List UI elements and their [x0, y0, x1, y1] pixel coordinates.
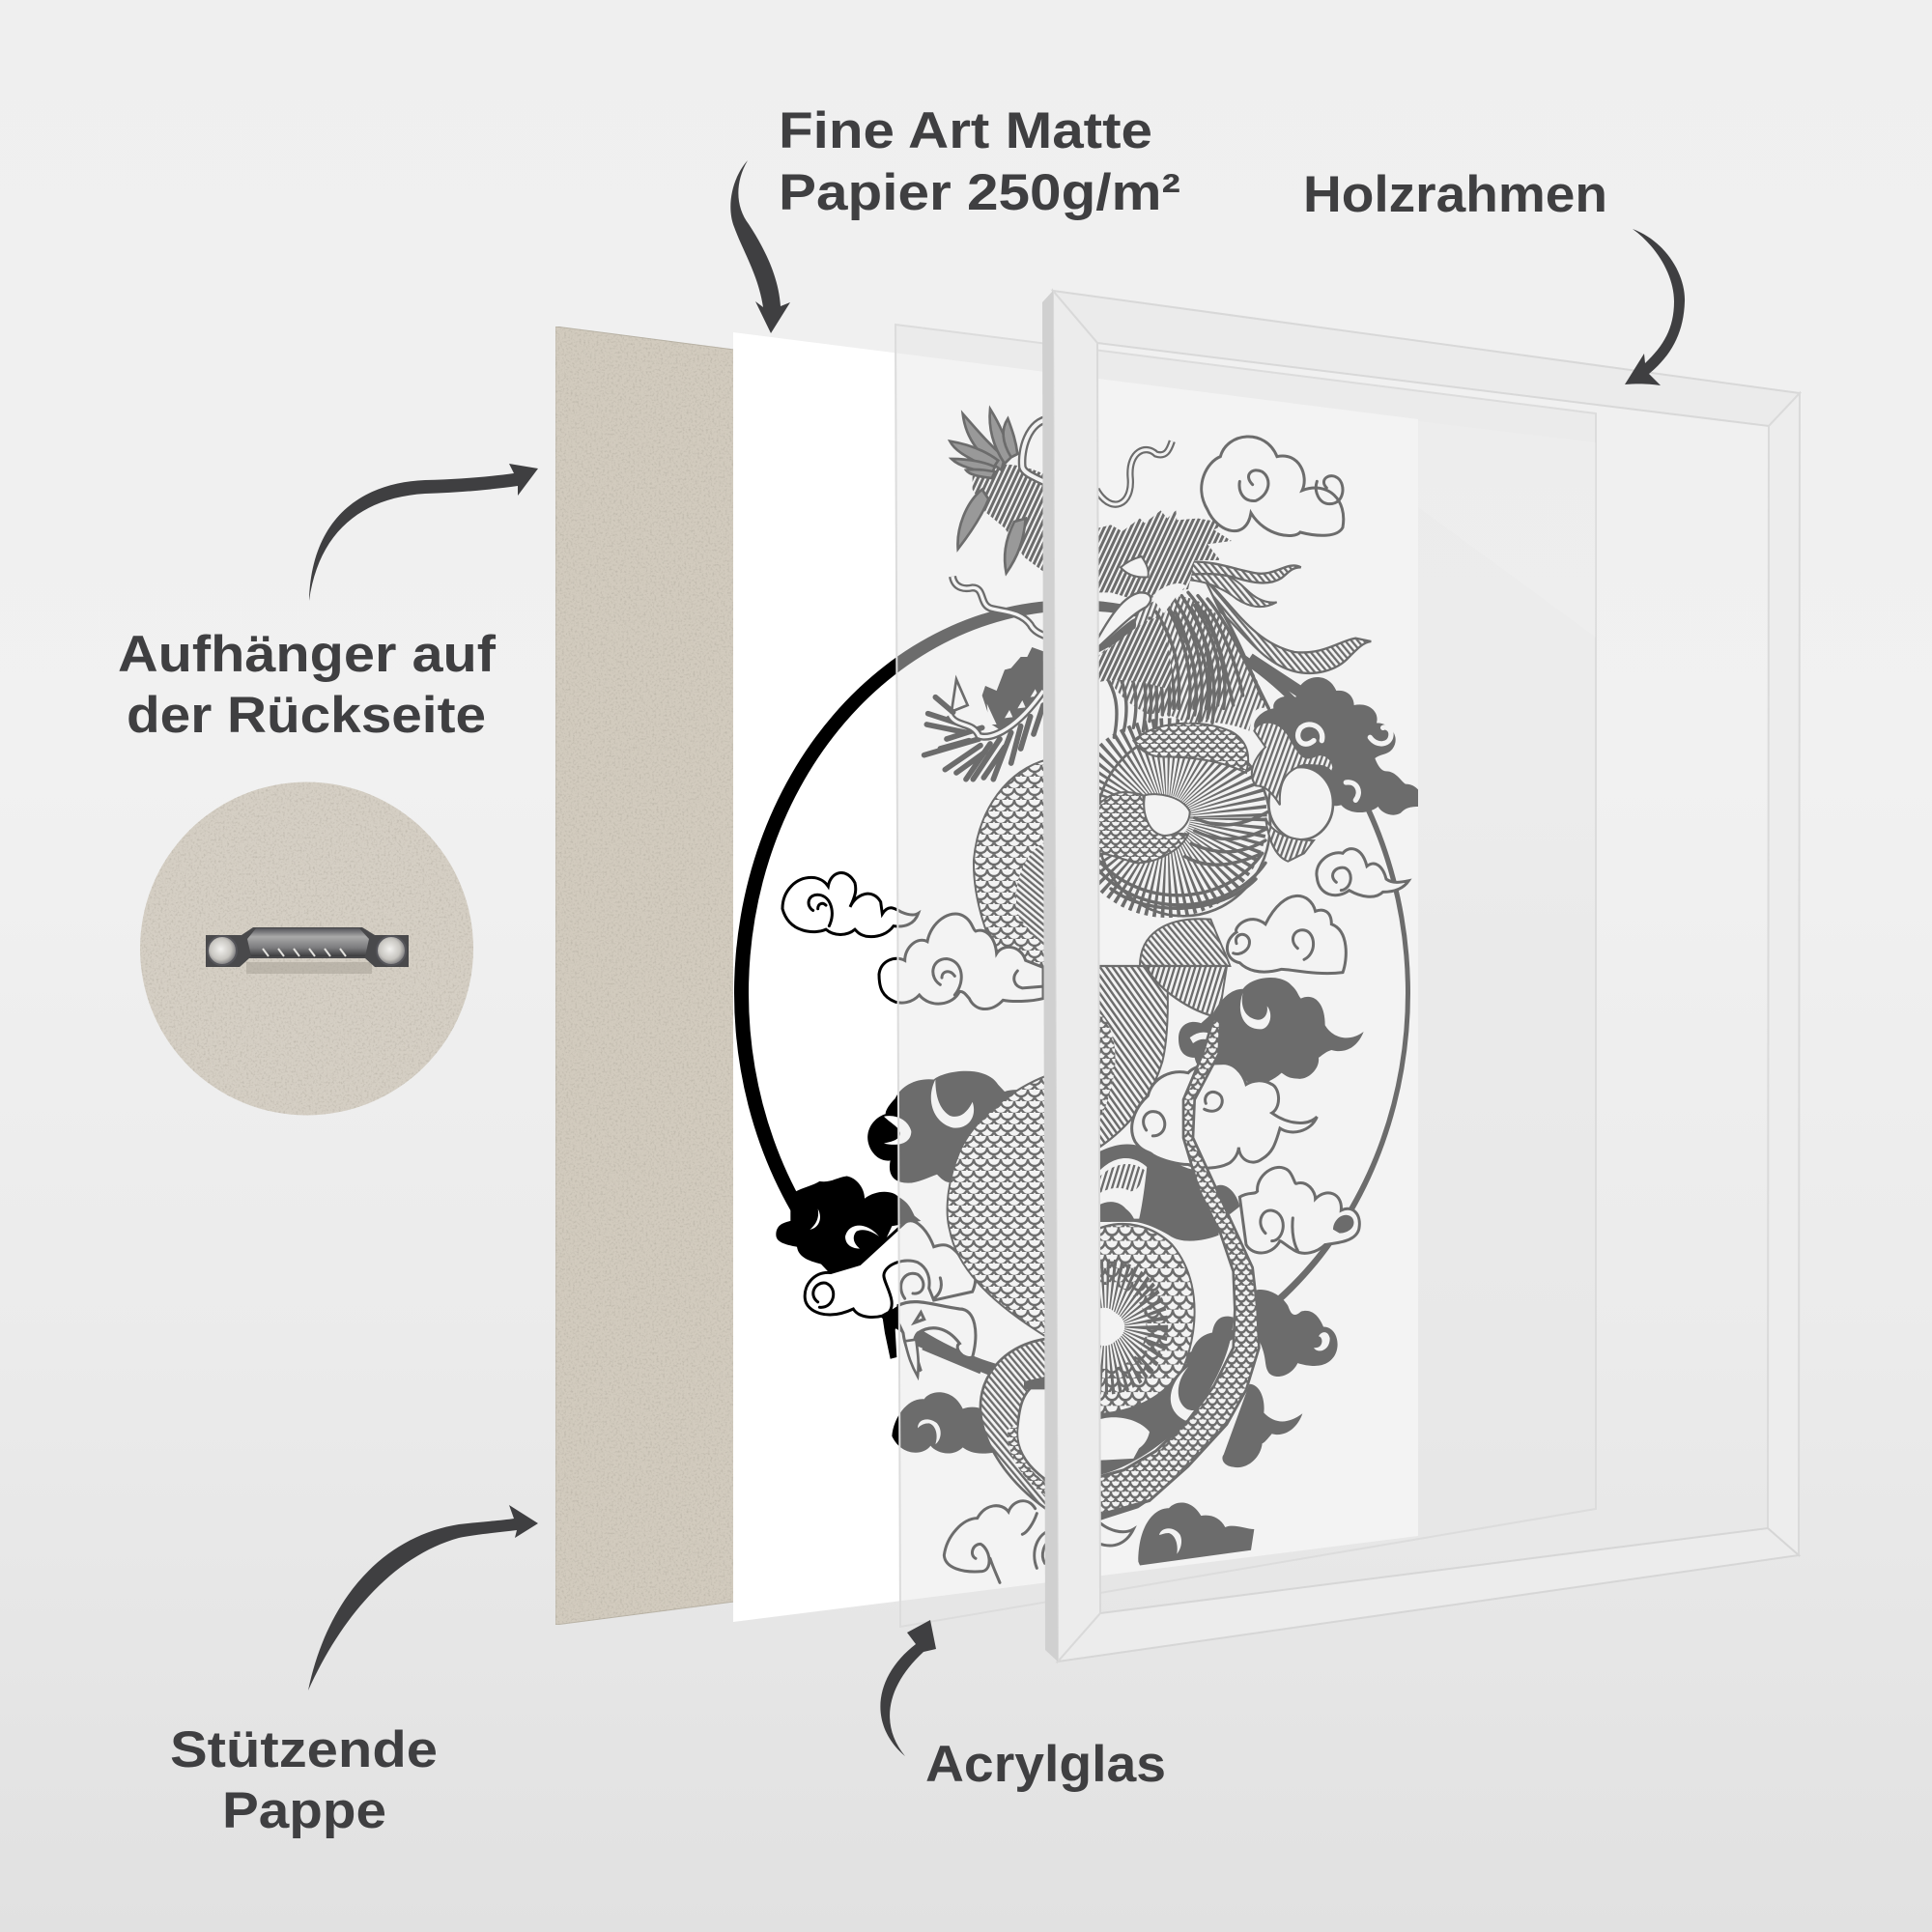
talon [905, 1340, 919, 1377]
paw shade [1096, 1202, 1127, 1222]
swirls of cloud F [1144, 1092, 1222, 1136]
neck and head of dragon, right side [1096, 437, 1420, 974]
frame top rail [1053, 291, 1800, 426]
hanger teeth [263, 949, 346, 956]
white cloud in solid [1096, 1417, 1150, 1461]
leg and talons [898, 1302, 976, 1371]
glare on acrylic glass [1418, 421, 1596, 638]
paw detail [1096, 1164, 1145, 1195]
callout: hanger detail circle [140, 782, 473, 1115]
white spot [1144, 794, 1190, 836]
scale fill under disc [1096, 1500, 1150, 1521]
panel: supporting cardboard [555, 327, 734, 1625]
crescent under disc [1171, 1367, 1208, 1421]
cloud I upper [1254, 1290, 1338, 1377]
ring thick section near cloud B [1249, 659, 1301, 693]
outlined cloud C [1317, 849, 1408, 896]
lower left scales [948, 1075, 1048, 1338]
lower fan concentric curves [1098, 811, 1268, 908]
lower fan band [980, 1337, 1045, 1510]
swirls of cloud A [1239, 470, 1343, 504]
label: acrylic glass: Acrylglas [925, 1736, 1166, 1793]
label: hanger [118, 626, 496, 744]
upper head: hair mass [972, 464, 1043, 572]
label: hanger: der Rückseite [127, 687, 486, 744]
hanger tabs [206, 927, 409, 967]
bar in lower band [1024, 1378, 1045, 1389]
mane strands [1104, 592, 1268, 737]
horn two [1205, 578, 1371, 673]
outlined cloud P [805, 1221, 976, 1317]
upper head: crest leaves [950, 409, 1026, 573]
label: paper: Papier 250g/m² [779, 164, 1180, 221]
left body inner hatch [1016, 842, 1043, 946]
small dark cloud [1214, 1185, 1239, 1214]
disc of scales [1096, 1224, 1195, 1414]
middle body and lower right of dragon [1065, 966, 1364, 1566]
cloud K [1138, 1502, 1254, 1566]
hair curl [1181, 564, 1277, 607]
tail tuft [1140, 919, 1230, 966]
disc centre [1089, 1308, 1121, 1346]
frame left rail [1053, 291, 1100, 1662]
label: hanger: Aufhänger auf [118, 626, 496, 683]
paw under head [1096, 1157, 1148, 1220]
swirls of cloud P [813, 1273, 941, 1307]
label: supporting cardboard: Pappe [222, 1782, 386, 1839]
arrow: to acrylic [880, 1620, 936, 1756]
small whisk by frame [1096, 1520, 1133, 1546]
swirl in lump [1191, 1036, 1215, 1044]
crescent of cloud K [1159, 1528, 1181, 1554]
middle body scales [1096, 1011, 1116, 1126]
nostril shade [1096, 618, 1136, 654]
label: paper: Fine Art Matte [779, 102, 1152, 159]
scales of lower band [1008, 1424, 1045, 1495]
upper head: whisker loop [1022, 418, 1050, 485]
swirl of cloud Q [809, 895, 832, 926]
crescent of cloud E [1240, 993, 1270, 1029]
hanger soft shadow [246, 962, 372, 974]
label: frame: Holzrahmen [1303, 166, 1607, 223]
ring bar [924, 1345, 982, 1369]
panel: fine art paper with dragon artwork [733, 332, 1420, 1622]
outlined cloud R [879, 914, 1043, 1009]
tail ribbon with scales [1096, 1019, 1259, 1516]
arrow: to hanger cardboard [309, 464, 538, 601]
arrow: to frame [1625, 229, 1685, 385]
swirls of cloud G [1261, 1210, 1297, 1250]
neck scales band [1133, 724, 1248, 773]
solid cloud H [1096, 1145, 1219, 1241]
small swirl lump [1179, 1011, 1219, 1067]
outlined cloud D [1227, 895, 1346, 974]
hanger body [247, 928, 369, 956]
outlined cloud A [1202, 437, 1344, 535]
label: supporting cardboard [170, 1721, 438, 1839]
outlined cloud F [1132, 1064, 1317, 1168]
lower jaw and crest [924, 647, 1050, 780]
orb [1268, 767, 1333, 839]
frame side face [1042, 291, 1058, 1662]
solid cloud M [892, 1392, 995, 1454]
whisker above head [1096, 441, 1172, 504]
swirl of cloud C [1333, 867, 1350, 891]
paw scales [1098, 792, 1188, 863]
panel: wooden frame [1042, 291, 1800, 1662]
mane mass [1098, 596, 1268, 731]
arrow: to paper [730, 160, 790, 333]
large solid cloud under disc [1096, 1317, 1234, 1476]
crescent of cloud I [1314, 1332, 1330, 1350]
swirls of cloud D [1234, 930, 1314, 959]
solid cloud N [867, 1070, 1016, 1183]
solid cloud B [1254, 677, 1420, 815]
lower left cloud and fan [892, 1338, 1053, 1582]
disc fan spokes [1065, 1285, 1147, 1369]
swirl of cloud R [933, 958, 1043, 995]
arrow: to supporting cardboard [308, 1505, 538, 1690]
fan spokes [1106, 756, 1229, 879]
solid cloud O [776, 1176, 921, 1274]
white streak [1152, 583, 1186, 613]
outlined cloud L [944, 1501, 1053, 1582]
label: supporting cardboard: Stützende [170, 1721, 438, 1778]
panel: acrylic glass sheet [895, 325, 1596, 1627]
claw under orb [1265, 818, 1314, 862]
neck fan with spokes [1096, 732, 1270, 916]
label: paper [779, 102, 1180, 221]
head crest [1098, 510, 1232, 602]
lower whisker [952, 577, 1050, 638]
middle body hatch [1096, 966, 1168, 1150]
eye [1121, 556, 1149, 578]
cloud B swirls [1298, 724, 1391, 800]
solid cloud E [1214, 978, 1364, 1085]
snout [1096, 592, 1151, 649]
outlined cloud Q [782, 873, 919, 937]
swirl at ring end [1333, 1215, 1353, 1234]
muzzle hair [1096, 618, 1172, 689]
tail tuft lower strands [1147, 966, 1227, 1017]
left body scales [972, 759, 1043, 966]
circle ring of the artwork [734, 600, 1410, 1386]
claw on orb [1252, 723, 1334, 805]
left side clouds [776, 873, 1043, 1373]
cloud I lower [1222, 1384, 1302, 1467]
frame bottom rail [1058, 1528, 1799, 1662]
frame right rail [1768, 393, 1800, 1555]
ring bar and claw [918, 1343, 988, 1376]
rivets [208, 936, 406, 965]
outlined cloud G [1239, 1167, 1359, 1253]
upper head, whisker and left side of artwork [950, 409, 1050, 638]
horn one [1188, 561, 1301, 582]
